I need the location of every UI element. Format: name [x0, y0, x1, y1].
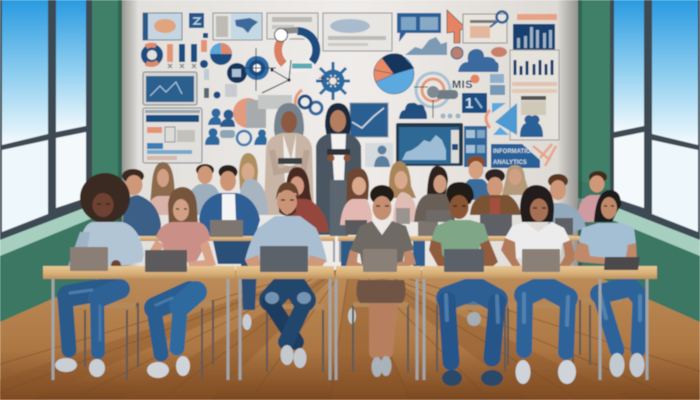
front row: student 2, pink tee [147, 187, 216, 380]
salmon heading strip [517, 14, 557, 20]
cloud icon [458, 49, 499, 72]
text card [267, 13, 318, 39]
web page tablet [143, 108, 202, 163]
gauge circle [414, 73, 458, 118]
blue data card [397, 13, 441, 42]
salmon arrow cursor [447, 10, 467, 43]
cube icons [490, 74, 505, 95]
decorative salmon strokes [533, 144, 556, 166]
laptops on front desks [70, 246, 640, 272]
world map card [213, 13, 262, 40]
large donut chart [274, 28, 316, 68]
student: blonde girl in gray top [238, 153, 268, 215]
monitor with area chart [396, 123, 463, 166]
student: boy in blue jumper [462, 156, 490, 200]
afro hair [80, 173, 130, 223]
banner with text: INFORMATION [493, 149, 535, 155]
shoes [55, 358, 105, 377]
target diagram [227, 48, 291, 93]
small dots [440, 114, 460, 118]
banner with text: ANALYTICS [493, 160, 527, 166]
student: blonde girl [502, 165, 530, 195]
front row: student 5, green tee [429, 182, 505, 386]
floor [0, 255, 700, 400]
front desks [43, 266, 657, 380]
blue numbered tile [462, 93, 487, 113]
student: dark-haired girl in brown top [414, 166, 455, 222]
wall infographic posters: right half [350, 10, 559, 168]
blue side panel [464, 126, 487, 167]
back row laptops [210, 208, 573, 237]
line chart tablet [143, 72, 197, 105]
bar chart card [510, 50, 559, 140]
wall infographic posters: left half [143, 13, 392, 163]
map card [143, 13, 182, 40]
sweater [79, 222, 144, 266]
front row: student 3, bearded man [245, 182, 327, 372]
small pie chart [210, 43, 232, 65]
teacher: left, beige blazer with tablet [264, 103, 314, 215]
mountain chart [405, 37, 447, 55]
front row: student 6, white tee [501, 185, 576, 384]
card with flow diagram [323, 13, 392, 51]
student: girl in red top [284, 167, 329, 232]
gear icons [295, 62, 350, 115]
triangle shapes [486, 103, 517, 135]
student: boy in blue blazer [199, 165, 260, 236]
small gray stacks [204, 69, 237, 98]
banner with text [491, 144, 540, 168]
student: long brown hair, pink top [146, 162, 180, 215]
MIS label [452, 74, 480, 91]
teacher: right, gray blazer with tablet [316, 103, 362, 236]
student: navy sweater boy [122, 169, 161, 236]
people icons [205, 108, 267, 145]
back row students [122, 153, 608, 330]
right side wall with window [578, 0, 700, 322]
chair [68, 303, 138, 380]
audience silhouettes [399, 103, 427, 119]
student: boy in gray-blue shirt [548, 174, 586, 232]
student: boy in gray shirt [186, 164, 222, 215]
document with magnifier [463, 12, 508, 43]
navy area chart [513, 24, 555, 51]
MIS label: MIS [452, 79, 473, 91]
pie chart [374, 54, 414, 94]
student: boy in pink shirt [577, 171, 608, 222]
blue numbered tile: 1 [465, 95, 473, 112]
dark line chart panel [350, 103, 388, 137]
student: boy in brown plaid [470, 169, 521, 215]
back row jeans and shoes [213, 241, 481, 330]
small brain icons [451, 47, 507, 59]
portrait card [365, 143, 393, 167]
tablet held by teacher [278, 158, 302, 164]
front row: student 7, blue tee [573, 190, 644, 377]
student: girl in pink, long hair [340, 168, 372, 226]
front row: student 4, gray tee and skirt [346, 185, 416, 377]
column icons [167, 33, 208, 68]
back wall [120, 0, 580, 270]
small donut chart [144, 45, 160, 65]
blue square icon [189, 13, 204, 28]
people silhouettes [520, 115, 543, 137]
salmon and gray circle [233, 95, 292, 128]
tablet held by teacher [327, 149, 350, 155]
jeans [65, 288, 120, 352]
left side wall with window [0, 0, 122, 322]
back desk row [140, 236, 582, 262]
student: blonde girl in pink [388, 161, 416, 222]
front row: student 1, afro hair [55, 173, 144, 380]
